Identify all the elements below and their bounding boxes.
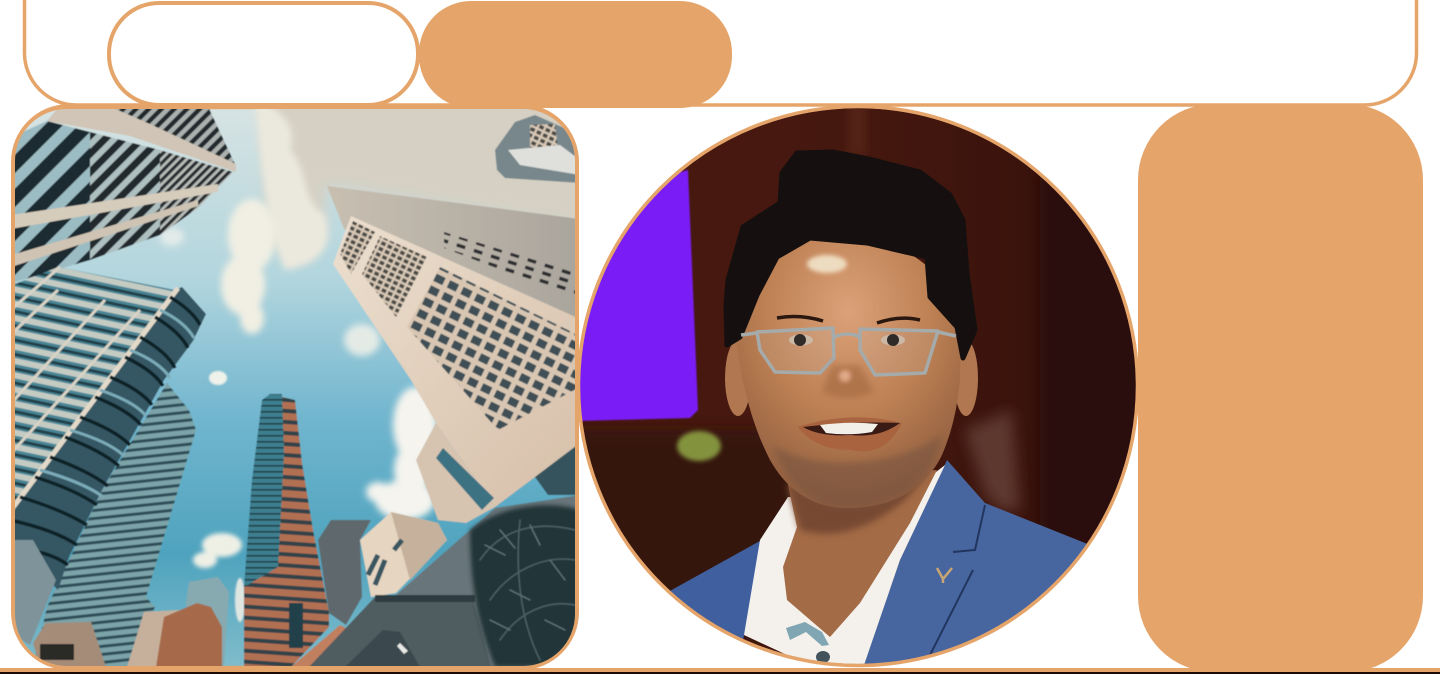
outlined pill	[109, 3, 418, 105]
eyebrows	[777, 317, 920, 323]
bottom dark strip	[0, 672, 1440, 674]
neck shadow	[787, 470, 930, 534]
building: low brown block	[33, 622, 106, 667]
building: lower left glass	[15, 539, 56, 645]
jaw shadow	[772, 435, 942, 508]
collar button	[816, 651, 830, 663]
foreground base	[309, 595, 491, 667]
blazer right	[862, 460, 1100, 670]
building: back glass tower	[33, 383, 196, 667]
panel: portrait	[570, 105, 1150, 670]
green light	[677, 431, 721, 461]
nose highlight	[839, 370, 851, 382]
blazer left	[670, 541, 760, 639]
backdrop wall	[578, 105, 1138, 667]
mouth	[798, 417, 902, 451]
filled pill	[419, 1, 732, 108]
building: center tower	[244, 394, 350, 667]
clouds	[160, 60, 650, 622]
building: top left tower	[15, 109, 236, 282]
eyes	[789, 334, 905, 346]
lapel seam	[930, 505, 985, 655]
forehead highlight	[807, 255, 847, 273]
building: left glass tower	[15, 266, 174, 502]
purple screen	[578, 170, 698, 421]
building: grey back	[318, 520, 371, 625]
shirt	[744, 465, 945, 668]
foreground pediment	[396, 495, 580, 667]
nose	[822, 365, 874, 398]
building: white teal tower	[186, 577, 229, 667]
ears	[725, 340, 978, 416]
building: curved tower	[5, 287, 206, 590]
palm foliage	[470, 505, 580, 667]
building: low beige	[127, 610, 182, 667]
top frame outline	[24, 0, 1416, 105]
pin	[937, 568, 952, 583]
right filled panel	[1138, 104, 1423, 672]
sky	[15, 109, 575, 666]
building: right tower	[327, 186, 580, 523]
bottom bar	[0, 668, 1440, 672]
glasses	[741, 328, 956, 375]
neck	[783, 470, 937, 637]
hair	[726, 152, 975, 358]
shirt print	[786, 622, 829, 646]
building: red brown	[156, 603, 222, 667]
face	[736, 235, 960, 508]
building: top right tower	[495, 115, 580, 183]
building: beige midrise	[360, 512, 447, 597]
panel: city photo	[11, 104, 579, 668]
